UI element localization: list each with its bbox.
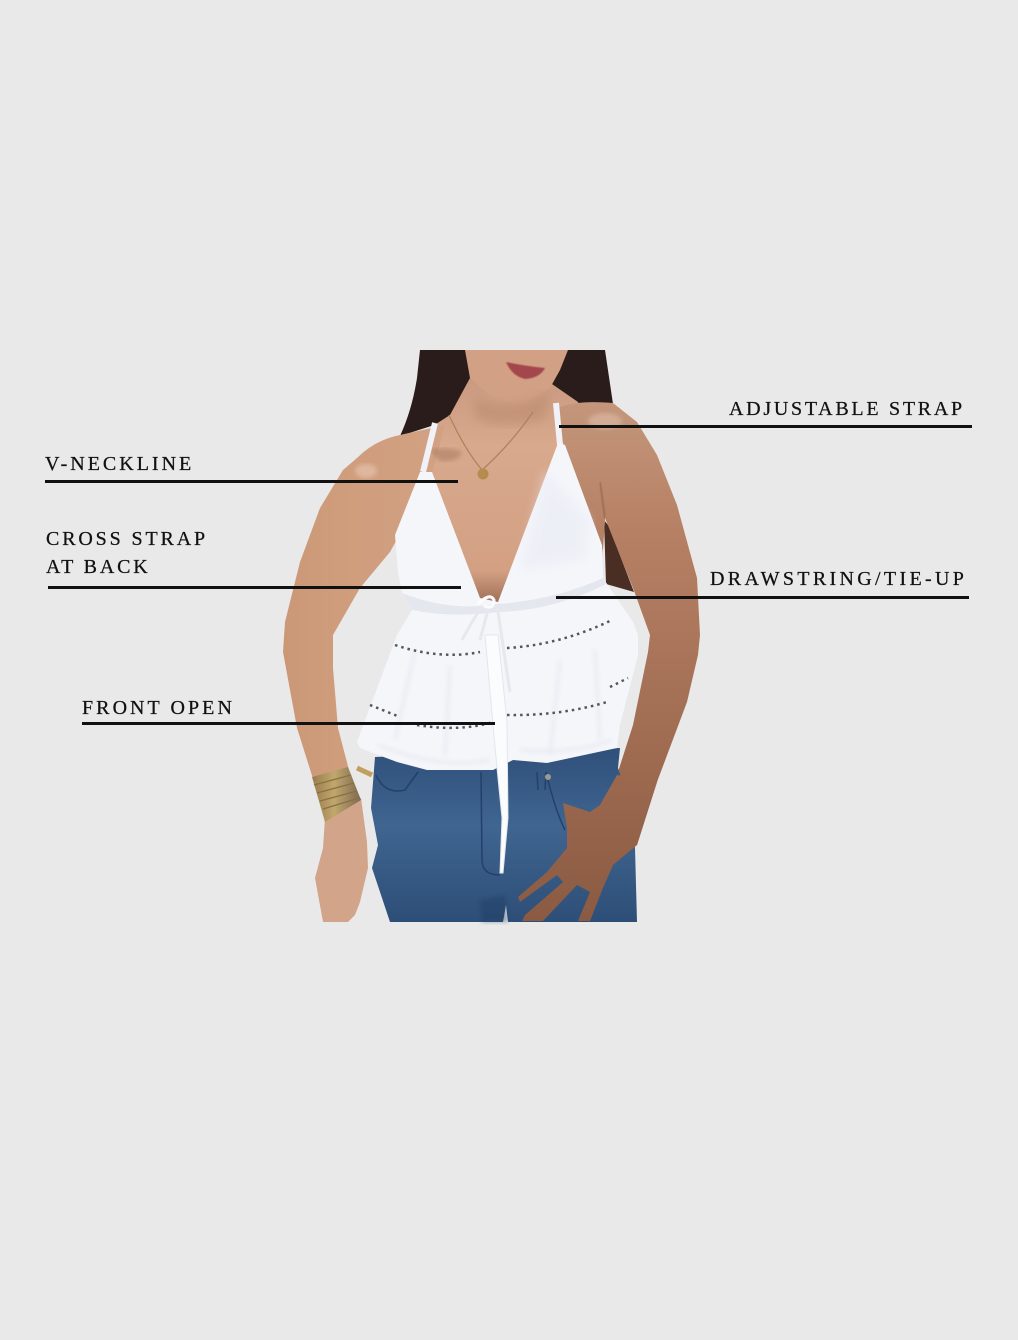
face xyxy=(465,350,568,405)
left arm xyxy=(283,425,445,782)
right hand xyxy=(518,775,657,921)
callout: cross strap at back: AT BACK xyxy=(46,556,151,578)
neck shadow xyxy=(475,392,550,425)
bracelet lines xyxy=(314,775,359,809)
necklace xyxy=(449,412,533,470)
callout: drawstring/tie-up xyxy=(556,568,969,599)
jeans button xyxy=(545,774,551,780)
photo: model wearing white top xyxy=(283,350,700,922)
tie knot xyxy=(478,597,494,607)
straps xyxy=(423,403,560,472)
callout: adjustable strap: ADJUSTABLE STRAP xyxy=(729,398,965,420)
jeans xyxy=(371,748,637,922)
lips xyxy=(506,362,545,379)
callout: front open xyxy=(82,697,495,725)
chest and neck xyxy=(428,378,605,605)
callout: drawstring/tie-up: DRAWSTRING/TIE-UP xyxy=(710,568,967,590)
long tie strip xyxy=(485,635,508,873)
white top xyxy=(357,443,638,770)
collarbone shadow xyxy=(430,448,462,461)
right arm xyxy=(558,402,700,845)
right shoulder highlight xyxy=(588,413,622,429)
jeans pocket and fly xyxy=(376,772,565,875)
hair xyxy=(400,350,613,436)
shoulder highlight xyxy=(355,464,377,478)
bracelet xyxy=(312,767,361,822)
callout: v-neckline xyxy=(45,453,458,483)
drawstring ties xyxy=(462,604,510,692)
jeans shadow xyxy=(480,895,508,922)
back shadow behind right arm xyxy=(604,520,634,592)
left hand xyxy=(315,798,368,922)
top shading xyxy=(402,578,606,615)
eyelet rows xyxy=(370,620,628,728)
callout: adjustable strap xyxy=(559,398,972,428)
fabric folds xyxy=(378,650,612,763)
callout: v-neckline: V-NECKLINE xyxy=(45,453,194,475)
callout: front open: FRONT OPEN xyxy=(82,697,235,719)
armpit crease xyxy=(600,482,605,518)
callout: cross strap at back: CROSS STRAP xyxy=(46,528,208,550)
pendant xyxy=(478,468,488,480)
callout: cross strap at back xyxy=(46,528,461,589)
belt hook detail xyxy=(357,768,372,775)
cup shading xyxy=(520,470,590,570)
